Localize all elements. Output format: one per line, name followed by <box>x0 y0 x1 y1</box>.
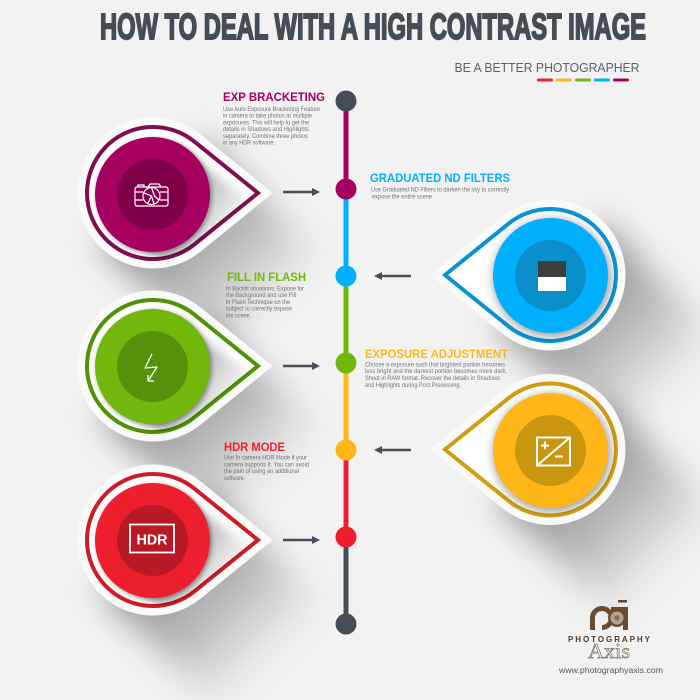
text block: exp bracketing: EXP BRACKETING <box>223 91 325 104</box>
circle shadow <box>494 394 610 512</box>
logo script: Axis <box>588 639 630 663</box>
logo url: www.photographyaxis.com <box>558 665 663 675</box>
circle shadow <box>94 482 246 606</box>
text block: exp bracketing: exposures. This will help to get the <box>223 120 310 126</box>
circle shadow <box>94 136 246 259</box>
text block: hdr mode: camera supports it. You can avoid <box>224 462 309 468</box>
coloured ring <box>87 300 258 432</box>
logo: photography axis <box>558 600 663 675</box>
text block: fill in flash: the scene. <box>226 314 251 320</box>
drop shadow <box>101 314 326 539</box>
panel: exposure adjustment drop <box>431 374 700 622</box>
coloured ring <box>87 474 258 606</box>
inner circle <box>117 331 188 402</box>
timeline <box>336 90 356 634</box>
colour key bars <box>537 78 629 82</box>
text block: exp bracketing: Use Auto Exposure Bracketing Feature <box>223 107 321 113</box>
main circle <box>493 218 608 333</box>
drop shadow <box>101 488 326 700</box>
text block: exposure adjustment: less bright and the darkest portion becomes more dark. <box>365 369 507 375</box>
logo wordmark: PHOTOGRAPHY <box>568 635 651 644</box>
icon: hdr <box>130 524 174 552</box>
inner circle <box>515 240 586 311</box>
arrow: hdr mode <box>283 536 320 544</box>
text block: fill in flash <box>226 271 306 320</box>
text block: graduated nd filters <box>370 172 510 200</box>
text block: exposure adjustment <box>365 348 508 389</box>
white paper drop <box>78 118 272 268</box>
text block: exposure adjustment: Shoot in RAW format. Recover the details in Shadows <box>365 376 500 382</box>
text block: fill in flash: FILL IN FLASH <box>227 271 306 284</box>
icon: nd filter <box>538 261 566 291</box>
arrow: fill in flash <box>283 362 320 370</box>
coloured ring <box>445 384 616 516</box>
text block: fill in flash: In Backlit situations. Expose for <box>226 286 304 292</box>
text block: fill in flash: in Flash Technique on the <box>226 300 291 306</box>
inner circle <box>515 415 586 486</box>
icon: hdr: HDR <box>136 532 168 548</box>
circle shadow <box>494 220 610 336</box>
arrow: exp bracketing <box>283 188 320 196</box>
panel: graduated nd filters drop <box>442 207 700 422</box>
inner circle <box>117 159 188 230</box>
inner circle <box>117 505 188 576</box>
text block: hdr mode: the pain of using an additional <box>224 469 299 475</box>
text block: hdr mode <box>224 441 309 482</box>
icon: camera <box>135 184 168 206</box>
drop shadow <box>498 223 700 448</box>
drop shadow <box>498 397 700 622</box>
coloured ring <box>87 127 258 259</box>
main circle <box>493 393 608 508</box>
text block: graduated nd filters: expose the entire scene <box>372 194 433 200</box>
subtitle: BE A BETTER PHOTOGRAPHER <box>454 60 640 75</box>
logo icon <box>592 600 627 630</box>
text block: exposure adjustment: and Highlights during Post Processing. <box>365 383 461 389</box>
panel: exp bracketing drop <box>85 125 310 335</box>
text block: exp bracketing <box>223 91 325 147</box>
main circle <box>95 309 210 424</box>
text block: exposure adjustment: EXPOSURE ADJUSTMENT <box>365 348 508 361</box>
text block: graduated nd filters: Use Graduated ND Filters to darken the sky to correctly <box>371 188 509 194</box>
circle shadow <box>94 308 246 432</box>
panel: fill in flash drop <box>85 290 310 508</box>
main circle <box>95 137 210 252</box>
text block: hdr mode: HDR MODE <box>224 441 285 454</box>
white paper drop <box>78 465 272 615</box>
drop shadow <box>101 141 326 366</box>
text block: fill in flash: the Background and use Fill <box>226 293 296 299</box>
icon: exposure compensation <box>537 438 570 466</box>
arrow: exposure adjustment <box>374 446 411 454</box>
text block: exposure adjustment: Choose a exposure such that brightest portion becomes <box>365 362 505 368</box>
white paper drop <box>78 291 272 441</box>
arrow: graduated nd <box>374 272 411 280</box>
coloured ring <box>445 209 616 341</box>
white paper drop <box>431 374 625 524</box>
main circle <box>95 483 210 598</box>
text block: exp bracketing: separately. Combine three photos <box>223 134 308 140</box>
panel: hdr mode drop <box>85 464 310 697</box>
white paper drop <box>431 200 625 350</box>
text block: graduated nd filters: GRADUATED ND FILTERS <box>370 172 510 185</box>
text block: hdr mode: Use In camera HDR Mode if your <box>224 456 307 462</box>
text block: fill in flash: subject to correctly expose <box>226 307 293 313</box>
text block: hdr mode: software. <box>224 476 245 482</box>
text block: exp bracketing: details in Shadows and Highlights <box>223 127 309 133</box>
text block: exp bracketing: in any HDR software. <box>223 141 275 147</box>
text block: exp bracketing: in camera to take photos at multiple <box>223 114 313 120</box>
icon: flash <box>145 354 157 381</box>
